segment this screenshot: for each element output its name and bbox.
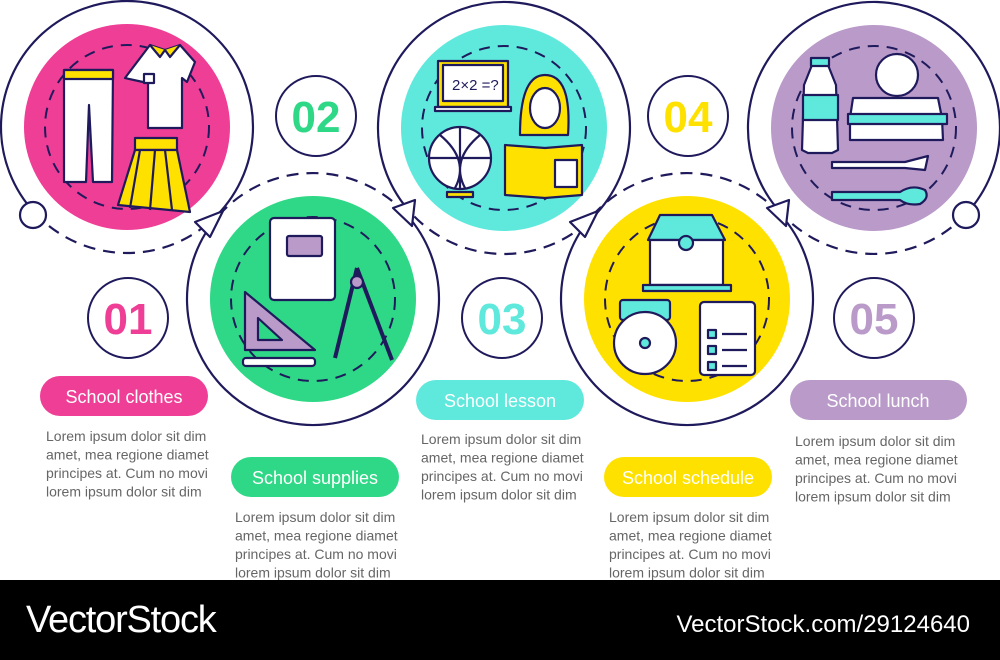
descriptions: principes at. Cum no movi — [795, 470, 957, 486]
pills — [40, 376, 967, 497]
descriptions: amet, mea regione diamet — [46, 446, 209, 462]
icon: clothes — [64, 45, 195, 212]
number circles: 02 — [292, 93, 340, 142]
descriptions: principes at. Cum no movi — [46, 465, 208, 481]
descriptions: lorem ipsum dolor sit dim — [235, 564, 391, 580]
pills: School lesson — [444, 391, 556, 411]
footer bar: VectorStock — [26, 599, 218, 641]
descriptions: principes at. Cum no movi — [235, 546, 397, 562]
number circles: 01 — [104, 295, 152, 344]
descriptions: lorem ipsum dolor sit dim — [421, 486, 577, 502]
footer bar — [0, 580, 1000, 660]
footer bar: VectorStock.com/29124640 — [676, 611, 970, 638]
descriptions: amet, mea regione diamet — [235, 528, 398, 544]
descriptions: principes at. Cum no movi — [609, 546, 771, 562]
descriptions: amet, mea regione diamet — [795, 452, 958, 468]
ring 2 — [187, 173, 439, 425]
descriptions: principes at. Cum no movi — [421, 468, 583, 484]
descriptions: Lorem ipsum dolor sit dim — [795, 433, 955, 449]
descriptions: Lorem ipsum dolor sit dim — [46, 428, 206, 444]
descriptions: amet, mea regione diamet — [609, 528, 772, 544]
number circles: 04 — [664, 93, 713, 142]
icon: supplies — [243, 218, 392, 366]
descriptions — [46, 428, 958, 580]
descriptions: lorem ipsum dolor sit dim — [46, 484, 202, 500]
icon: lunch — [802, 54, 947, 204]
pills: School supplies — [252, 468, 378, 488]
number circles — [88, 76, 914, 358]
ring 5 — [748, 2, 1000, 254]
icon: lesson: 2×2 =? — [452, 77, 499, 94]
ring 1 — [1, 1, 253, 253]
descriptions: Lorem ipsum dolor sit dim — [235, 509, 395, 525]
pills: School clothes — [65, 387, 183, 407]
arrows — [195, 200, 789, 237]
descriptions: amet, mea regione diamet — [421, 450, 584, 466]
number circles: 05 — [850, 295, 898, 344]
ring 3 — [378, 2, 630, 254]
number circles: 03 — [478, 295, 526, 344]
descriptions: Lorem ipsum dolor sit dim — [609, 509, 769, 525]
colored circles — [24, 24, 977, 402]
pills: School lunch — [826, 391, 930, 411]
descriptions: Lorem ipsum dolor sit dim — [421, 431, 581, 447]
ring 4 — [561, 173, 813, 425]
pills: School schedule — [622, 468, 754, 488]
icon: lesson — [429, 61, 582, 198]
descriptions: lorem ipsum dolor sit dim — [609, 564, 765, 580]
icon: schedule — [614, 215, 755, 375]
descriptions: lorem ipsum dolor sit dim — [795, 488, 951, 504]
